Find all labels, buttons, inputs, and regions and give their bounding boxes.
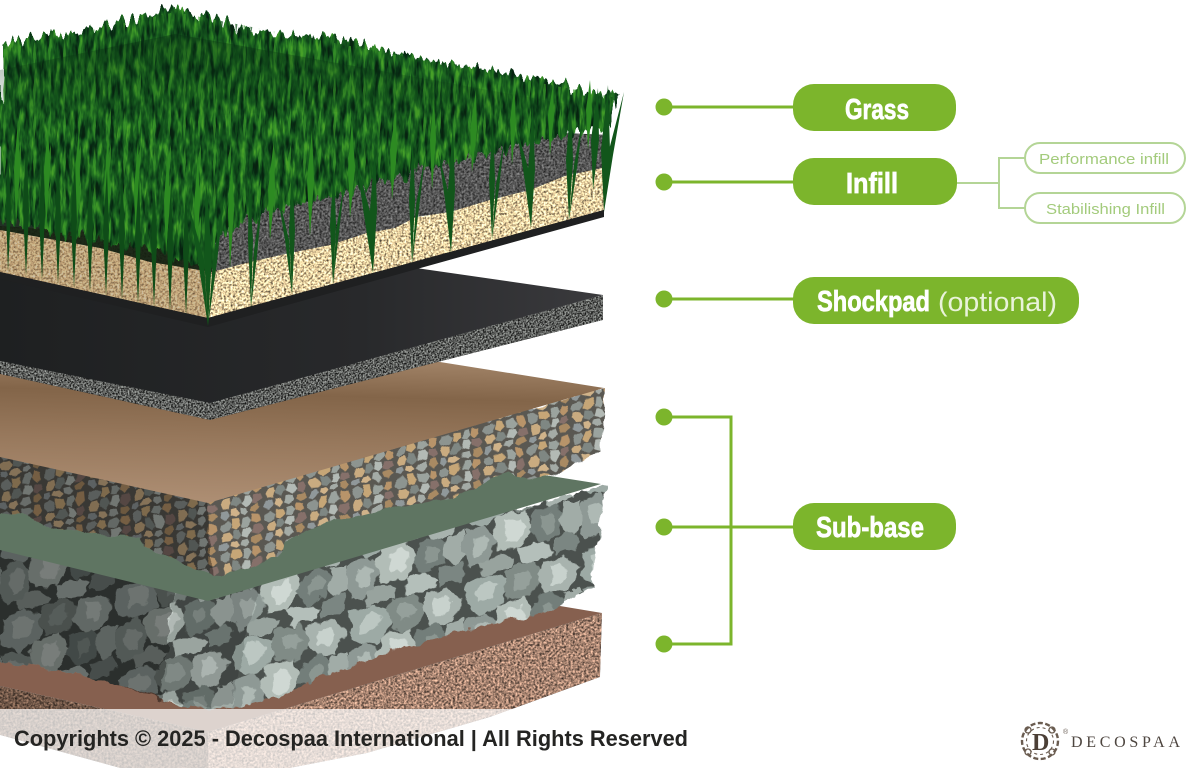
layer: coarse crushed rock bbox=[0, 485, 606, 708]
footer band bbox=[0, 709, 1186, 768]
label: Grass: Grass bbox=[845, 94, 909, 126]
logo monogram: D bbox=[1032, 730, 1049, 756]
shockpad top surface bbox=[0, 268, 603, 403]
grass: left face blades bbox=[6, 145, 189, 315]
soil left face bbox=[0, 686, 208, 768]
layer: brown geotextile top bbox=[0, 350, 604, 503]
leader: shockpad bbox=[656, 290, 795, 308]
grass blade overlay bbox=[0, 12, 618, 270]
shockpad edge bbox=[0, 295, 603, 420]
logo: Decospaa bbox=[1022, 723, 1180, 759]
layer: sand infill bbox=[0, 150, 604, 318]
rubber left shadow bbox=[0, 190, 212, 272]
logo emblem bbox=[1022, 723, 1058, 759]
soil front face bbox=[208, 613, 602, 768]
label: Stabilishing Infill: Stabilishing Infill bbox=[1046, 201, 1165, 218]
label: Performance infill bbox=[1025, 143, 1185, 173]
layer: soil base bbox=[0, 606, 602, 768]
bracket: sub-base leaders bbox=[656, 408, 795, 652]
soil top face bbox=[0, 606, 602, 732]
grass: bright front blades bbox=[14, 80, 592, 268]
layer: fine gravel bbox=[0, 388, 606, 578]
sand left face shading bbox=[0, 226, 208, 318]
label: Sub-base: Sub-base bbox=[816, 512, 924, 544]
label: Stabilishing Infill bbox=[1025, 193, 1185, 223]
label: Sub-base bbox=[793, 503, 956, 550]
grass: dark front blades bbox=[186, 85, 624, 326]
label: Shockpad (optional): Shockpad bbox=[817, 286, 930, 318]
layer: turf backing strip bbox=[0, 208, 604, 327]
grass: main mass bbox=[0, 6, 618, 270]
label: Grass bbox=[793, 84, 956, 131]
label: Performance infill: Performance infill bbox=[1039, 151, 1169, 168]
leader: grass bbox=[656, 98, 795, 116]
label: Infill bbox=[793, 158, 957, 205]
logo wordmark: DECOSPAA bbox=[1071, 734, 1180, 751]
grass back shading bbox=[0, 34, 600, 130]
logo registered mark: ® bbox=[1063, 728, 1069, 736]
layer: sage green membrane bbox=[0, 458, 601, 601]
leader: infill bbox=[656, 174, 795, 190]
copyright text: Copyrights © 2025 - Decospaa International | All Rights Reserved bbox=[14, 726, 688, 751]
layer: black shockpad bbox=[0, 268, 603, 420]
label: Infill: Infill bbox=[846, 168, 898, 200]
grass texture bbox=[0, 6, 618, 270]
connector: infill branches bbox=[957, 158, 1025, 208]
label: Shockpad (optional) bbox=[793, 277, 1079, 324]
label: Shockpad (optional): (optional) bbox=[938, 287, 1057, 317]
layer: rubber infill bbox=[212, 120, 608, 272]
